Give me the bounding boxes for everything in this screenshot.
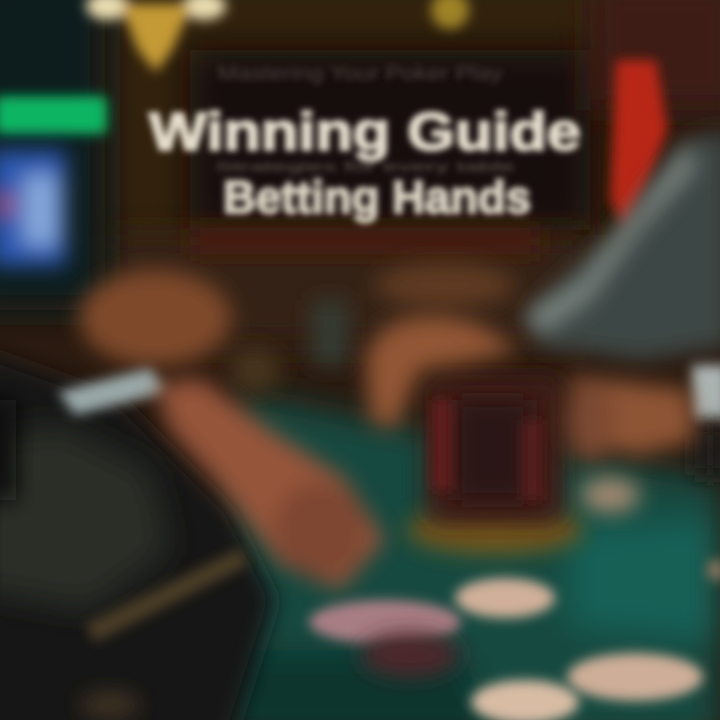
heading text [149,63,581,223]
subtitle line: Strategies for every table [215,159,515,174]
blue phone screen [0,150,66,266]
dark sleeve, lower left [0,350,275,720]
red cloth and grey sleeve at right [525,60,720,475]
poker chips on table [309,477,720,720]
white shirt cuff [58,368,168,415]
main title line two: Betting Hands [223,171,531,223]
small top line: Mastering Your Poker Play [218,63,502,85]
green sign bar [0,96,107,134]
chip stack in centre [407,375,583,554]
green poker table [220,395,720,720]
foreground hand, left [155,378,385,590]
right hand holding chips [365,316,695,462]
main title line one: Winning Guide [149,102,581,162]
background blurred hands [79,263,515,392]
gold emblem at top [86,0,469,72]
